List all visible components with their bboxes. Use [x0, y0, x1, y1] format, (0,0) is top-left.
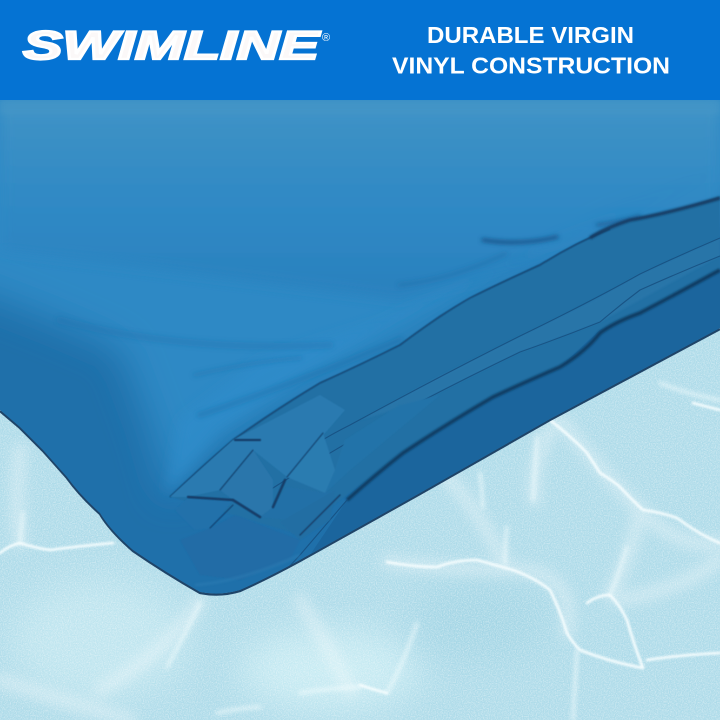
corner fold pieces: [170, 396, 430, 522]
logo: SWIMLINE: ®: [322, 32, 330, 44]
main crease: [170, 229, 610, 497]
top surface wrinkles: [156, 214, 641, 418]
bottom edge highlight: [259, 554, 300, 572]
top surface: [0, 100, 720, 484]
heading: [392, 22, 670, 78]
logo: SWIMLINE: [23, 24, 330, 68]
dark fold shadows: [188, 433, 340, 535]
vinyl liner fabric: [0, 100, 720, 596]
folded side layers: [176, 196, 720, 500]
thin crease lines: [262, 238, 720, 568]
fabric dark edge: [0, 329, 720, 595]
fabric base: [0, 100, 720, 594]
logo: SWIMLINE: SWIMLINE: [23, 24, 321, 68]
top surface gradient band: [0, 100, 720, 168]
heading: VINYL CONSTRUCTION: [392, 52, 670, 78]
lower dark crease: [347, 270, 720, 500]
header band: [0, 0, 720, 100]
heading: DURABLE VIRGIN: [427, 22, 634, 48]
caustic light lines: [0, 383, 720, 720]
caustic light glow: [0, 420, 720, 720]
blue highlight ridge: [170, 447, 198, 482]
